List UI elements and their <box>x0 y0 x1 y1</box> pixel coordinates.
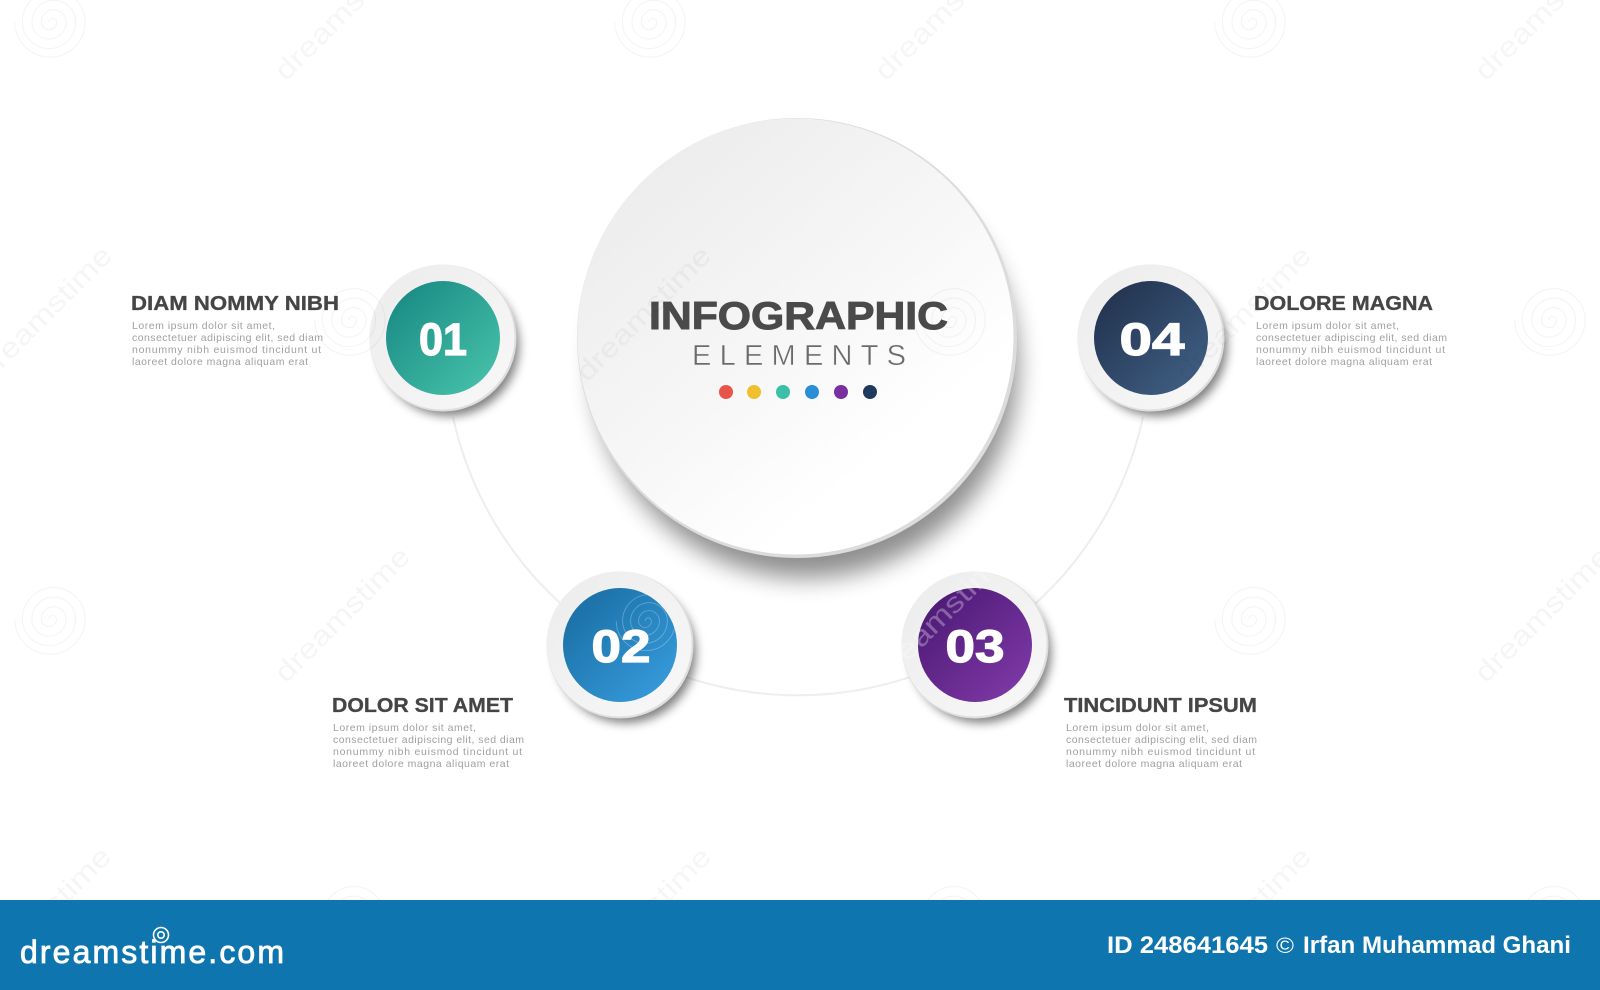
badge 04: 04 <box>1120 314 1184 365</box>
text block 04: laoreet dolore magna aliquam erat <box>1256 356 1432 368</box>
colour dots <box>719 385 877 399</box>
credit line: Irfan Muhammad Ghani <box>1303 932 1571 959</box>
credit line: ID 248641645 <box>1107 932 1268 959</box>
text block 02 <box>332 695 524 770</box>
subheading: elements: ELEMENTS <box>692 340 906 372</box>
text block 03: laoreet dolore magna aliquam erat <box>1066 758 1242 770</box>
watermark text: dreamstime <box>1468 540 1600 688</box>
credit line: © <box>1276 933 1294 958</box>
text block 01: nonummy nibh euismod tincidunt ut <box>132 344 321 356</box>
text block 03: TINCIDUNT IPSUM <box>1064 695 1257 717</box>
badge 03: 03 <box>946 621 1004 672</box>
badge 01 <box>370 264 519 416</box>
text block 01: DIAM NOMMY NIBH <box>131 293 339 315</box>
heading: infographic: INFOGRAPHIC <box>649 295 948 338</box>
text block 01: laoreet dolore magna aliquam erat <box>132 356 308 368</box>
watermark text: dreamstime <box>569 840 717 988</box>
text block 02: nonummy nibh euismod tincidunt ut <box>333 746 522 758</box>
icon: logo spiral <box>154 928 168 942</box>
logo wordmark: dreamstime.com <box>20 934 284 970</box>
text block 02: laoreet dolore magna aliquam erat <box>333 758 509 770</box>
title <box>649 295 948 372</box>
text block 03 <box>1064 695 1257 770</box>
text block 02: Lorem ipsum dolor sit amet, <box>333 722 476 734</box>
badge 02: 02 <box>592 621 650 672</box>
text block 04: consectetuer adipiscing elit, sed diam <box>1256 332 1447 344</box>
badge 04 <box>1078 264 1227 416</box>
central circle <box>577 118 1018 578</box>
watermark text: dreamstime <box>1169 840 1317 988</box>
text block 03: Lorem ipsum dolor sit amet, <box>1066 722 1209 734</box>
text block 01: consectetuer adipiscing elit, sed diam <box>132 332 323 344</box>
text block 04: Lorem ipsum dolor sit amet, <box>1256 320 1399 332</box>
watermark text: dreamstime <box>569 239 717 387</box>
watermark text: dreamstime <box>268 540 416 688</box>
badge 02 <box>546 572 696 723</box>
text block 03: nonummy nibh euismod tincidunt ut <box>1066 746 1255 758</box>
text block 04: nonummy nibh euismod tincidunt ut <box>1256 344 1445 356</box>
footer band <box>0 900 1600 990</box>
badge 01: 01 <box>419 314 467 365</box>
text block 02: consectetuer adipiscing elit, sed diam <box>333 734 524 746</box>
text block 01: Lorem ipsum dolor sit amet, <box>132 320 275 332</box>
text block 03: consectetuer adipiscing elit, sed diam <box>1066 734 1257 746</box>
watermark text: dreamstime <box>1169 239 1317 387</box>
watermark text: dreamstime <box>868 540 1016 688</box>
text block 01 <box>131 293 339 368</box>
text block 04: DOLORE MAGNA <box>1254 293 1433 315</box>
connecting arc <box>453 417 1143 695</box>
text block 04 <box>1254 293 1447 368</box>
credit line <box>1107 932 1571 959</box>
badge 03 <box>902 572 1051 723</box>
text block 02: DOLOR SIT AMET <box>332 695 513 717</box>
